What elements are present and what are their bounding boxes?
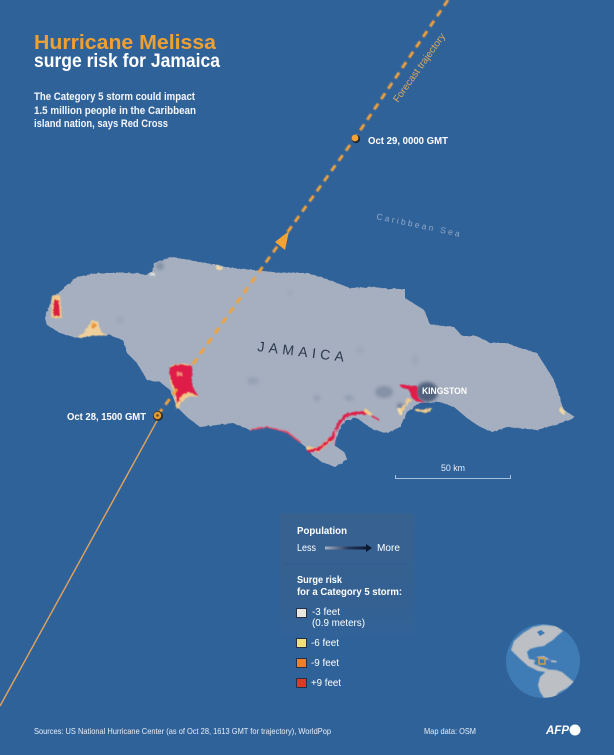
legend: population: Population bbox=[297, 525, 347, 537]
legend item: -3 feet bbox=[296, 607, 365, 629]
map label: Caribbean Sea: Caribbean Sea bbox=[376, 211, 461, 239]
legend item: -3 feet: -3 feet bbox=[312, 607, 340, 618]
legend: population: Less bbox=[297, 543, 316, 554]
intro text: island nation, says Red Cross bbox=[34, 118, 168, 130]
trajectory arrow head bbox=[275, 231, 289, 250]
legend: surge risk heading: for a Category 5 storm: bbox=[297, 586, 402, 598]
label: Oct 28, 1500 GMT: Oct 28, 1500 GMT bbox=[67, 411, 147, 423]
legend: population: More bbox=[377, 543, 400, 554]
map label: JAMAICA: JAMAICA bbox=[257, 338, 346, 365]
map data credit: Map data: OSM bbox=[424, 726, 476, 736]
legend item: +9 feet bbox=[296, 678, 341, 689]
label: Oct 29, 0000 GMT: Oct 29, 0000 GMT bbox=[368, 135, 449, 147]
AFP logo: AFP bbox=[545, 725, 569, 737]
legend item: -6 feet bbox=[296, 638, 339, 649]
island land mass bbox=[45, 257, 575, 467]
surge risk: Kingston bbox=[399, 384, 433, 414]
legend item: -6 feet: -6 feet bbox=[311, 638, 339, 649]
legend item: -9 feet bbox=[296, 658, 339, 669]
label: Forecast trajectory: Forecast trajectory bbox=[391, 32, 448, 105]
title: Hurricane Melissa bbox=[34, 31, 217, 54]
population density speckles bbox=[116, 262, 438, 409]
surge risk: north coast spots bbox=[150, 265, 223, 276]
intro text: The Category 5 storm could impact bbox=[34, 91, 195, 103]
locator globe bbox=[506, 624, 580, 698]
legend: surge risk heading: Surge risk bbox=[297, 574, 342, 586]
marker: Oct 29 bbox=[352, 135, 360, 143]
legend panel bbox=[280, 513, 414, 689]
map: Jamaica island bbox=[45, 257, 575, 467]
source footer: Sources: US National Hurricane Center (as of Oct 28, 1613 GMT for trajectory), WorldPop bbox=[34, 726, 331, 736]
past track line bbox=[0, 419, 158, 706]
surge risk: Savanna-la-Mar bbox=[78, 320, 108, 338]
intro text: 1.5 million people in the Caribbean bbox=[34, 105, 196, 117]
legend: population bbox=[297, 525, 400, 554]
scale bar: 50 km bbox=[396, 463, 510, 478]
surge risk: south coast bbox=[250, 410, 563, 451]
legend item: -3 feet: (0.9 meters) bbox=[312, 618, 365, 629]
legend item: -9 feet: -9 feet bbox=[311, 658, 339, 669]
title: surge risk for Jamaica bbox=[34, 51, 220, 72]
label: Kingston: KINGSTON bbox=[422, 386, 467, 396]
AFP logo bbox=[545, 724, 580, 737]
title bbox=[34, 31, 220, 72]
intro text bbox=[34, 91, 196, 130]
legend: surge risk heading bbox=[297, 574, 402, 598]
surge risk: Negril bbox=[51, 295, 62, 318]
forecast trajectory dashed line bbox=[160, 0, 448, 412]
surge risk: Montego Bay area bbox=[169, 363, 198, 409]
legend item: +9 feet: +9 feet bbox=[311, 678, 341, 689]
scale bar: 50 km: 50 km bbox=[441, 463, 465, 474]
marker: Oct 28 bbox=[153, 411, 163, 421]
